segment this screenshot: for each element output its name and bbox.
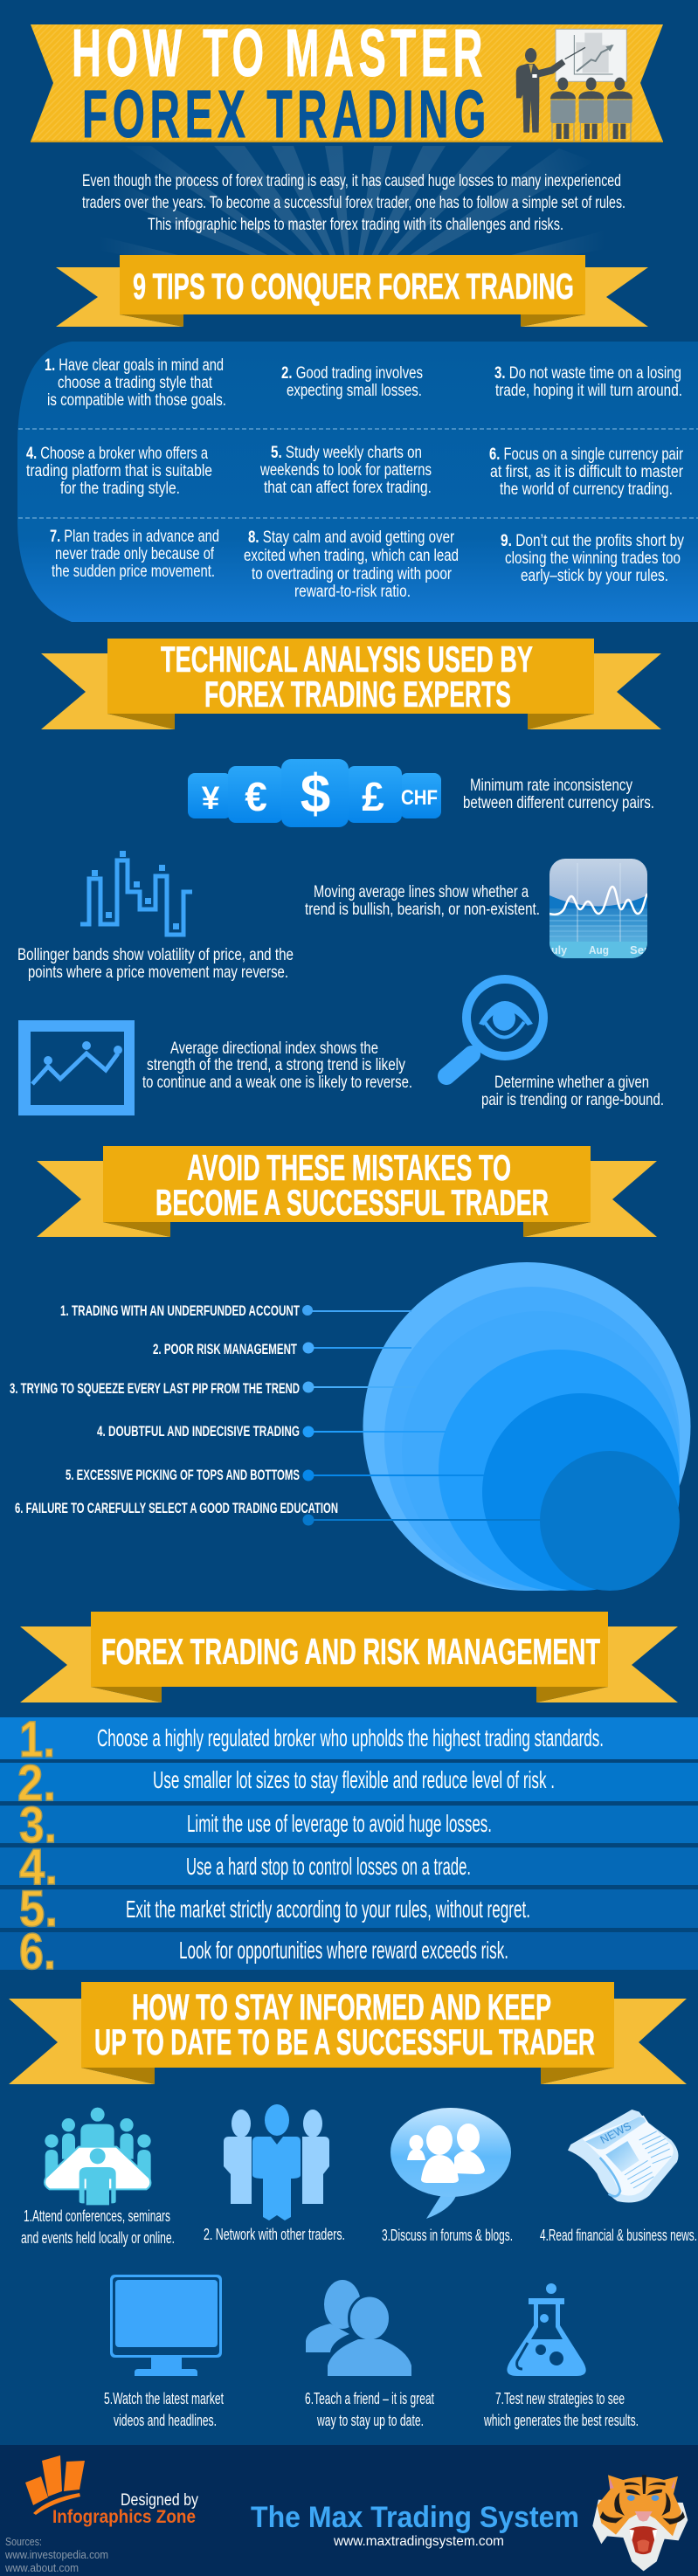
tip 5: 5. Study weekly charts on <box>271 444 422 462</box>
text: average directional index: strength of the trend, a strong trend is likely <box>147 1055 405 1074</box>
tip 8 <box>244 528 459 601</box>
intro paragraph <box>82 171 625 234</box>
sources: www.about.com <box>4 2561 79 2574</box>
tip 7: the sudden price movement. <box>52 563 215 581</box>
caption 1: and events held locally or online. <box>21 2229 175 2247</box>
tip 9: early–stick by your rules. <box>521 567 668 585</box>
caption 7: 7.Test new strategies to see <box>495 2390 625 2407</box>
text: average directional index: to continue and a weak one is likely to reverse. <box>142 1073 412 1092</box>
icon: monitor <box>110 2275 222 2376</box>
heading text <box>94 1986 595 2062</box>
icon: stock chart app: Sep <box>630 943 651 957</box>
text: average directional index <box>142 1039 412 1092</box>
tip 2: 2. Good trading involves <box>281 364 423 383</box>
caption 5 <box>104 2390 224 2429</box>
mistake 6 <box>15 1501 541 1525</box>
designed by: Designed by <box>121 2491 198 2510</box>
mistake 6: 6. FAILURE TO CAREFULLY SELECT A GOOD TRADING EDUCATION <box>15 1501 338 1516</box>
caption 6 <box>305 2390 434 2429</box>
icon: newspaper <box>568 2110 678 2202</box>
heading ribbon: avoid mistakes <box>37 1146 657 1237</box>
icon: flask <box>507 2283 586 2376</box>
tip 5 <box>259 444 432 497</box>
sources: www.investopedia.com <box>4 2548 108 2561</box>
tip 1: 1. Have clear goals in mind and <box>45 356 224 375</box>
text: average directional index: Average directional index shows the <box>170 1039 378 1058</box>
text: trending or range-bound: Determine whether a given <box>494 1073 649 1092</box>
tip 4: 4. Choose a broker who offers a <box>26 445 208 463</box>
tip 7: 7. Plan trades in advance and <box>50 528 219 546</box>
caption 6: way to stay up to date. <box>316 2412 424 2429</box>
heading text <box>155 1147 549 1223</box>
tip 3 <box>494 364 682 400</box>
icon: currency buttons <box>188 759 441 827</box>
risk row 3: 3. <box>19 1797 57 1854</box>
risk row 4: Use a hard stop to control losses on a trade. <box>186 1853 471 1880</box>
heading text: FOREX TRADING EXPERTS <box>204 673 511 715</box>
icon: team of three <box>224 2104 329 2220</box>
mistake 2: 2. POOR RISK MANAGEMENT <box>153 1342 297 1357</box>
icon: chat bubble <box>390 2108 511 2219</box>
tip 8: to overtrading or trading with poor <box>252 565 453 584</box>
intro paragraph: This infographic helps to master forex trading with its challenges and risks. <box>148 215 563 234</box>
heading ribbon: risk management <box>20 1612 678 1702</box>
risk row 5 <box>0 1881 698 1937</box>
tip 7 <box>50 528 219 581</box>
icon: tiger <box>592 2475 688 2571</box>
caption 1 <box>21 2207 175 2247</box>
icon: newspaper: NEWS <box>598 2120 633 2146</box>
tip 1: choose a trading style that <box>58 374 213 392</box>
icon: currency buttons: ¥ <box>202 780 220 816</box>
tip 8: reward-to-risk ratio. <box>294 583 411 601</box>
tip 8: 8. Stay calm and avoid getting over <box>248 528 455 547</box>
tip 4: for the trading style. <box>60 480 180 498</box>
risk row 4 <box>0 1839 698 1896</box>
footer panel <box>0 2445 698 2576</box>
logo: infographics zone <box>25 2455 198 2527</box>
tip 9 <box>501 532 684 585</box>
tip 2 <box>281 364 423 400</box>
heading text <box>161 639 533 715</box>
caption 6: 6.Teach a friend – it is great <box>305 2390 434 2407</box>
risk row 4: 4. <box>19 1839 58 1896</box>
risk row 2 <box>0 1755 698 1812</box>
tip 8: excited when trading, which can lead <box>244 547 459 565</box>
infographics zone wordmark: Infographics Zone <box>52 2507 196 2527</box>
heading ribbon: technical analysis <box>41 639 661 729</box>
icon: currency buttons: $ <box>301 764 330 825</box>
risk row 6 <box>0 1923 698 1980</box>
mistake 1: 1. TRADING WITH AN UNDERFUNDED ACCOUNT <box>60 1303 300 1319</box>
text: moving averages <box>305 882 540 919</box>
tip 1: is compatible with those goals. <box>47 391 226 410</box>
risk row 3: Limit the use of leverage to avoid huge losses. <box>187 1810 492 1837</box>
panel: 9 tips <box>17 342 698 622</box>
icon: presenter with audience <box>516 29 632 142</box>
mistake 4: 4. DOUBTFUL AND INDECISIVE TRADING <box>97 1424 300 1440</box>
text: rate inconsistency: Minimum rate inconsistency <box>470 776 632 795</box>
text: bollinger bands: Bollinger bands show volatility of price, and the <box>17 945 294 964</box>
brand url: www.maxtradingsystem.com <box>333 2534 504 2549</box>
text: moving averages: Moving average lines show whether a <box>314 882 529 901</box>
text: rate inconsistency <box>463 776 654 812</box>
text: trending or range-bound <box>481 1073 664 1109</box>
sources <box>4 2535 108 2574</box>
icon: currency buttons: CHF <box>401 786 438 810</box>
tip 6 <box>489 445 684 499</box>
text: moving averages: trend is bullish, bearish, or non-existent. <box>305 900 540 919</box>
heading ribbon: 9 tips <box>56 255 648 327</box>
tip 4: trading platform that is suitable <box>26 462 212 480</box>
heading ribbon: stay informed <box>9 1982 687 2084</box>
risk row 5: 5. <box>19 1881 58 1937</box>
tip 4 <box>26 445 212 498</box>
icon: currency buttons: £ <box>362 774 384 819</box>
chart: nested circles <box>363 1262 690 1591</box>
risk row 2: 2. <box>17 1755 56 1812</box>
heading text: AVOID THESE MISTAKES TO <box>187 1147 511 1188</box>
icon: magnifier with eye <box>446 979 543 1076</box>
caption 5: 5.Watch the latest market <box>104 2390 224 2407</box>
icon: average directional index chart <box>18 1020 135 1115</box>
tip 7: never trade only because of <box>55 545 215 563</box>
risk row 3 <box>0 1797 698 1854</box>
icon: two people <box>306 2280 411 2376</box>
risk row 1: 1. <box>19 1711 55 1768</box>
icon: stock chart app: Aug <box>589 943 609 957</box>
icon: currency buttons: € <box>245 774 267 819</box>
sources: Sources: <box>5 2535 42 2548</box>
mistake 3: 3. TRYING TO SQUEEZE EVERY LAST PIP FROM THE TREND <box>10 1381 300 1397</box>
icon: conference table <box>45 2108 151 2205</box>
background sunburst rays <box>35 146 651 297</box>
risk row 1 <box>0 1711 698 1768</box>
caption 2: 2. Network with other traders. <box>204 2226 345 2243</box>
icon: stock chart app: uly <box>551 943 568 957</box>
mistake 5: 5. EXCESSIVE PICKING OF TOPS AND BOTTOMS <box>66 1468 300 1483</box>
tip 2: expecting small losses. <box>287 382 422 400</box>
title banner <box>31 16 663 152</box>
caption 1: 1.Attend conferences, seminars <box>24 2207 170 2225</box>
caption 3: 3.Discuss in forums & blogs. <box>382 2227 513 2244</box>
tip 5: that can affect forex trading. <box>264 479 432 497</box>
tip 5: weekends to look for patterns <box>259 461 432 480</box>
tip 1 <box>45 356 226 410</box>
text: bollinger bands <box>17 945 294 982</box>
icon: bollinger bands <box>80 851 192 935</box>
risk row 6: 6. <box>19 1923 56 1980</box>
icon: stock chart app <box>549 859 651 958</box>
caption 7 <box>483 2390 639 2429</box>
brand name: The Max Trading System <box>251 2501 579 2534</box>
text: bollinger bands: points where a price movement may reverse. <box>28 963 288 982</box>
caption 5: videos and headlines. <box>114 2412 217 2429</box>
